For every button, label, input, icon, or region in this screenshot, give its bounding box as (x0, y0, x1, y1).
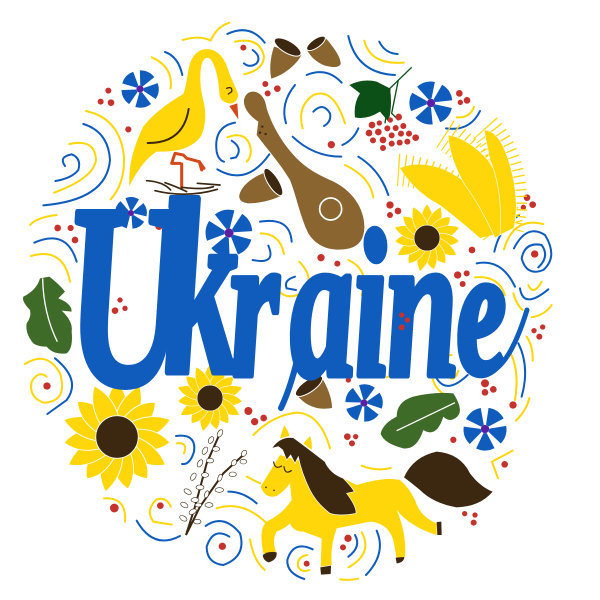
goose wing line (148, 109, 189, 143)
bandura sound hole (320, 198, 342, 220)
cornflower 5 (340, 381, 387, 426)
goose beak (229, 103, 238, 119)
title wordmark: i (347, 188, 393, 421)
decorative swirls around horse (244, 407, 478, 580)
title: Ukraine (60, 151, 527, 442)
acorn lower (292, 372, 332, 409)
decorative berries over the title area (111, 297, 410, 330)
cornflower 3 (112, 196, 150, 231)
horse hooves (263, 522, 442, 575)
sunflowers (61, 204, 461, 494)
bandura tuning pegs (259, 125, 267, 135)
wheat bristles (398, 128, 511, 232)
goose eye (227, 88, 232, 94)
cornflower 4 (199, 205, 259, 263)
title wordmark: k (155, 151, 245, 427)
decorative swirls: right side (432, 194, 552, 478)
nest (147, 181, 220, 194)
wheat (398, 128, 516, 238)
wheat ear middle (448, 135, 512, 238)
twigs (179, 429, 248, 535)
title wordmark: n (380, 188, 463, 421)
bandura (244, 92, 364, 250)
cornflower 2 (403, 76, 460, 131)
sunflower top right (393, 204, 461, 273)
horse mane (272, 437, 356, 515)
sunflower small left (176, 364, 244, 433)
wheat ear right (484, 130, 516, 235)
title flourishes (281, 310, 527, 408)
title wordmark: a (284, 188, 359, 421)
decorative swirls: centre (68, 201, 405, 383)
horse body (261, 455, 437, 567)
wheat ear left (400, 164, 505, 238)
horse tail (404, 452, 493, 507)
goose on nest (129, 49, 238, 194)
viburnum leaf and berries (349, 67, 419, 151)
goose legs (172, 153, 204, 188)
title wordmark: U (60, 152, 197, 442)
oak leaf left (23, 277, 72, 354)
acorns top and left (239, 33, 341, 203)
title wordmark: r (224, 188, 286, 421)
oak leaf right (381, 393, 460, 448)
horse ears (280, 425, 312, 450)
cornflower 6 (453, 398, 517, 461)
decorative swirls: lower left (25, 358, 267, 565)
horse (261, 425, 493, 575)
decorative swirls: left side (30, 111, 131, 282)
cornflower 1 (113, 63, 166, 116)
sunflower large (61, 381, 173, 494)
horse eyes and nostrils (274, 462, 291, 472)
decorative swirls: top right (348, 36, 480, 129)
cornflowers (112, 63, 517, 461)
title wordmark: e (451, 210, 511, 414)
decorative swirls: top and goose area (98, 23, 388, 230)
goose body (129, 49, 238, 186)
